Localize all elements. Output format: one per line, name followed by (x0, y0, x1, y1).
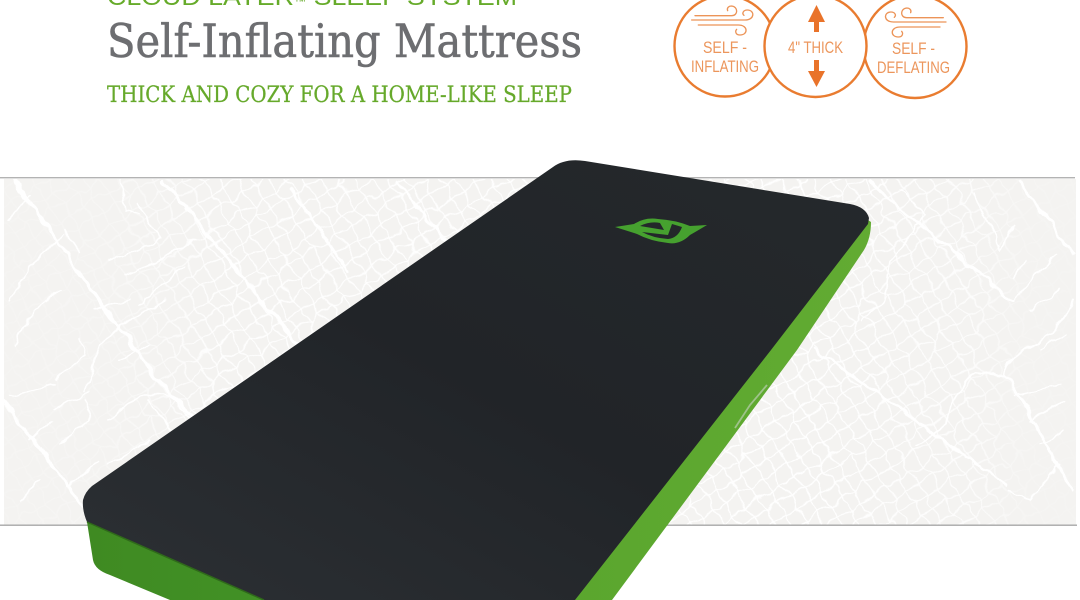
badge: self-inflating (674, 0, 776, 96)
badge: self-inflating: INFLATING (691, 58, 759, 76)
icon: leaf logo (615, 219, 707, 243)
badge: self-inflating: SELF - (703, 39, 747, 57)
badge: self-deflating (864, 0, 966, 98)
badge: 4 inch thick: 4" THICK (788, 39, 843, 57)
mattress side (87, 220, 871, 600)
bottom rule (0, 524, 1077, 526)
title: Self-Inflating Mattress (107, 14, 582, 68)
icon: wind (692, 6, 753, 35)
badge: 4 inch thick (764, 0, 866, 97)
badge: self-deflating: SELF - (892, 40, 935, 58)
mattress top (83, 160, 869, 600)
arrow: up (808, 5, 825, 32)
leaf texture band (0, 170, 1080, 530)
icon: wind mirrored (885, 8, 946, 37)
top rule (0, 177, 1075, 178)
arrow: down (808, 60, 825, 87)
badge: self-deflating: DEFLATING (877, 59, 950, 77)
side label smudge (735, 385, 767, 428)
mattress (83, 160, 871, 600)
subtitle: THICK AND COZY FOR A HOME-LIKE SLEEP (107, 82, 572, 108)
